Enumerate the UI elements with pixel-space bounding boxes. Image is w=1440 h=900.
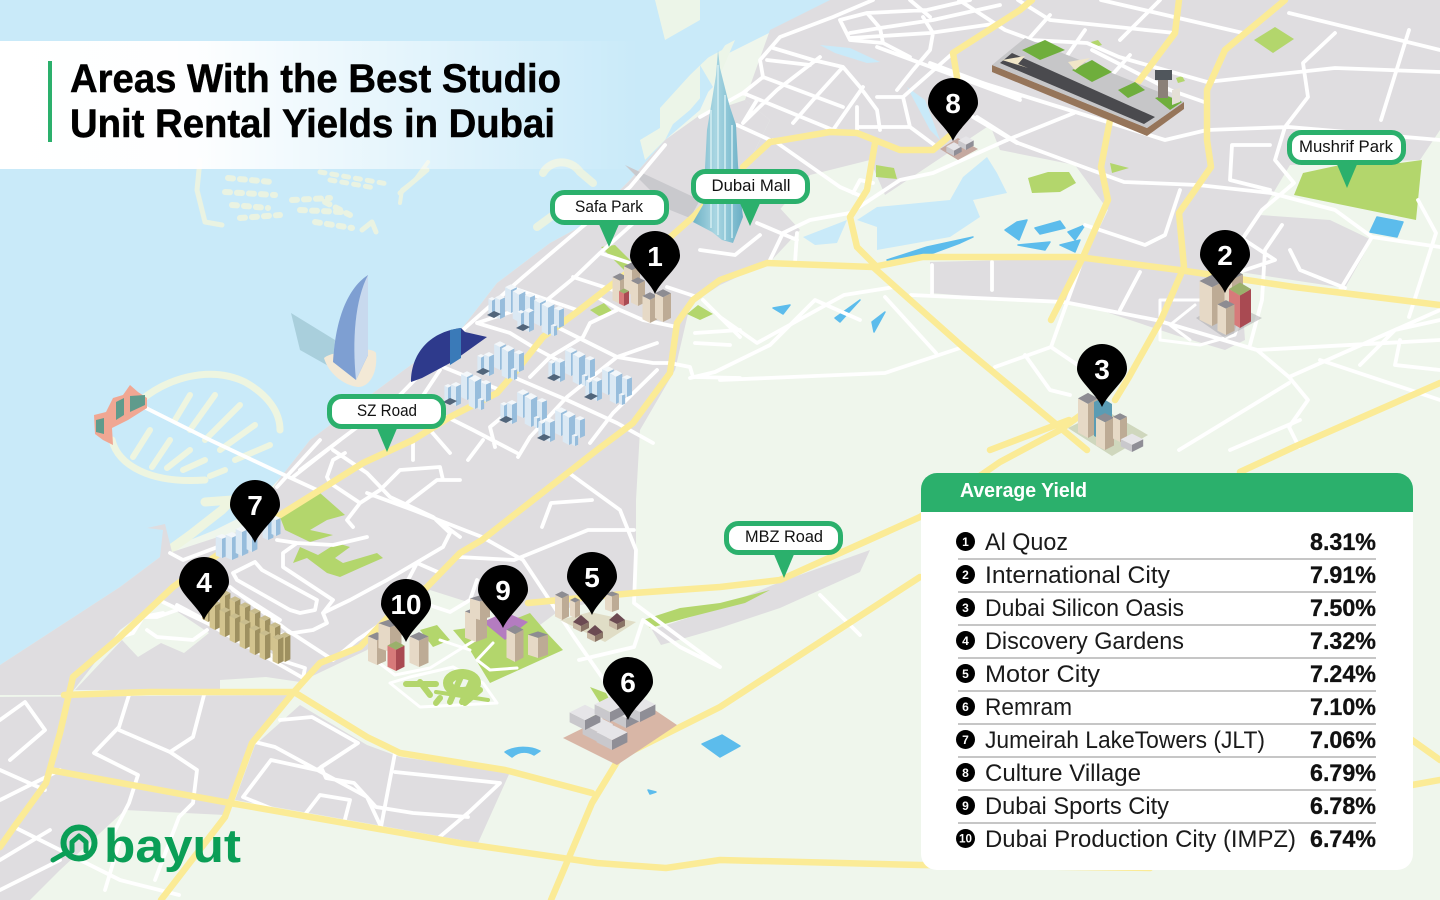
row 8: 6.79% <box>1310 760 1376 787</box>
callout: Dubai Mall <box>694 172 808 226</box>
row 2: 2 <box>962 568 969 582</box>
row 4: 4 <box>962 634 969 648</box>
row 2 <box>956 562 1376 589</box>
panel body <box>921 473 1413 870</box>
coastal strip grid <box>300 145 740 470</box>
row 10: 10 <box>959 832 972 846</box>
callout: Safa Park <box>552 192 666 247</box>
row 3: 3 <box>962 601 969 615</box>
pin 7 <box>230 480 280 543</box>
pin 3 <box>1077 344 1127 407</box>
pin 2: 2 <box>1217 240 1233 271</box>
logo: bayut <box>53 819 241 872</box>
water channels near Burj <box>700 0 850 100</box>
title accent bar <box>48 61 52 142</box>
building cluster: Dubai Silicon Oasis <box>1068 393 1148 456</box>
row 1 <box>956 529 1376 556</box>
title: Areas With the Best Studio <box>70 57 561 101</box>
port and coastal reclaimed land <box>640 0 735 160</box>
row 4: Discovery Gardens <box>985 628 1184 655</box>
row 6: 7.10% <box>1310 694 1376 721</box>
pin 8: 8 <box>945 88 961 119</box>
row 1: 1 <box>962 535 969 549</box>
pin 1: 1 <box>647 241 663 272</box>
pin 8 <box>928 78 978 141</box>
row 2: International City <box>985 562 1170 589</box>
leaf shaped park <box>406 672 488 703</box>
callout: Mushrif Park <box>1290 132 1404 188</box>
landmark: Atlantis <box>94 385 147 445</box>
row 5: 7.24% <box>1310 661 1376 688</box>
row 9: 9 <box>962 799 969 813</box>
building cluster: Al Quoz <box>612 262 671 323</box>
row 7: 7 <box>962 733 969 747</box>
callout: Mushrif Park: Mushrif Park <box>1299 137 1393 156</box>
panel: average yield table <box>921 473 1413 870</box>
row 7: 7.06% <box>1310 727 1376 754</box>
pin 9 <box>478 565 528 628</box>
building clusters: blue towers <box>443 284 632 446</box>
pin 2 <box>1200 230 1250 293</box>
landmark: Jumeirah hotel <box>411 328 487 382</box>
title <box>70 57 561 146</box>
building cluster: Remram <box>563 697 677 765</box>
row 4: 7.32% <box>1310 628 1376 655</box>
palm island <box>112 374 280 548</box>
row 5 <box>956 661 1376 688</box>
callout: MBZ Road: MBZ Road <box>745 527 823 546</box>
row 6: Remram <box>985 694 1072 721</box>
building cluster: Jumeirah Lake Towers <box>216 516 280 560</box>
panel header <box>921 473 1413 512</box>
building cluster: Dubai Sports City <box>465 595 548 662</box>
row 3: 7.50% <box>1310 595 1376 622</box>
pin 7: 7 <box>247 490 263 521</box>
row separators <box>958 559 1376 823</box>
ring roads around buildings <box>1160 300 1240 345</box>
row 6 <box>956 694 1376 721</box>
south west <box>0 695 204 895</box>
row 1: 8.31% <box>1310 529 1376 556</box>
pin 4 <box>179 557 229 620</box>
row 2: 7.91% <box>1310 562 1376 589</box>
callout: Dubai Mall: Dubai Mall <box>712 176 790 195</box>
parks <box>280 27 1422 718</box>
callout: MBZ Road <box>726 524 840 578</box>
title band <box>0 41 640 169</box>
offshore islands <box>197 160 593 232</box>
lakes <box>505 217 1403 794</box>
row 3: Dubai Silicon Oasis <box>985 595 1184 622</box>
building cluster: International City <box>1196 269 1262 338</box>
row 9: Dubai Sports City <box>985 793 1169 820</box>
pin 4: 4 <box>196 567 212 598</box>
panel heading: Average Yield <box>960 480 1087 502</box>
row 9 <box>956 793 1376 820</box>
callout: SZ Road: SZ Road <box>357 401 417 420</box>
title: Unit Rental Yields in Dubai <box>70 102 555 146</box>
pin 5: 5 <box>584 562 600 593</box>
row 7: Jumeirah LakeTowers (JLT) <box>985 727 1265 754</box>
inland west <box>120 405 720 683</box>
Burj shadow <box>625 165 700 218</box>
pin 10 <box>381 579 431 642</box>
building cluster: Discovery Gardens <box>202 586 290 664</box>
building cluster: Culture Village <box>940 136 978 160</box>
row 5: Motor City <box>985 661 1100 688</box>
row 1: Al Quoz <box>985 529 1068 556</box>
row 10: Dubai Production City (IMPZ) <box>985 826 1296 853</box>
row 5: 5 <box>962 667 969 681</box>
pin 9: 9 <box>495 575 511 606</box>
logo wordmark: bayut <box>104 819 241 872</box>
logo icon: magnifier with house <box>53 828 94 860</box>
row 3 <box>956 595 1376 622</box>
pin 10: 10 <box>390 589 422 620</box>
callout: Safa Park: Safa Park <box>575 197 643 216</box>
landmark: airport <box>992 38 1184 136</box>
row 8: 8 <box>962 766 969 780</box>
row 6: 6 <box>962 700 969 714</box>
creek and Ras Al Khor water <box>803 45 1007 250</box>
pin 3: 3 <box>1094 354 1110 385</box>
row 4 <box>956 628 1376 655</box>
pin 6: 6 <box>620 667 636 698</box>
building cluster: Dubai Production City <box>368 619 428 671</box>
pin 6 <box>603 657 653 720</box>
row 9: 6.78% <box>1310 793 1376 820</box>
old Dubai <box>700 0 1020 263</box>
pin 1 <box>630 231 680 294</box>
row 8: Culture Village <box>985 760 1141 787</box>
callout: SZ Road <box>330 396 444 452</box>
landmark: Burj Khalifa <box>693 50 743 243</box>
pin 5 <box>567 552 617 615</box>
row 8 <box>956 760 1376 787</box>
landmark: Burj Al Arab <box>291 275 376 387</box>
east <box>931 0 1440 345</box>
building cluster: Motor City <box>555 591 636 642</box>
row 10: 6.74% <box>1310 826 1376 853</box>
